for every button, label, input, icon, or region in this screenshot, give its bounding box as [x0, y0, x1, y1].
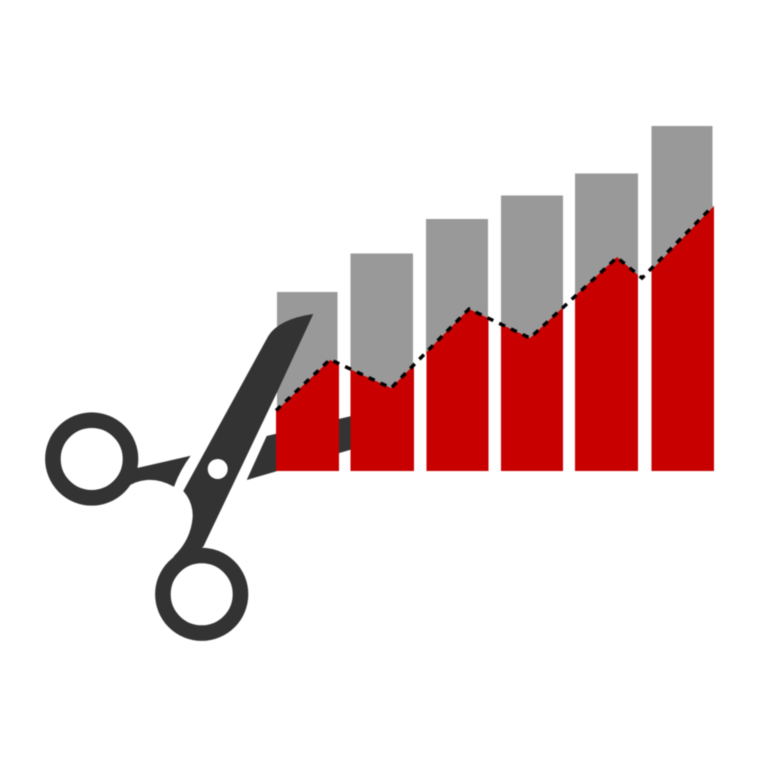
chart: remaining red bars [276, 206, 714, 471]
chart: original gray bars [277, 126, 712, 417]
cut line: dashed trend line [276, 206, 713, 410]
pivot hole [208, 459, 228, 479]
icon: scissors [53, 314, 360, 633]
upper blade and lower handle [163, 314, 313, 633]
left finger ring [53, 420, 131, 498]
lower blade and left handle [53, 414, 360, 500]
right finger ring [163, 556, 240, 633]
